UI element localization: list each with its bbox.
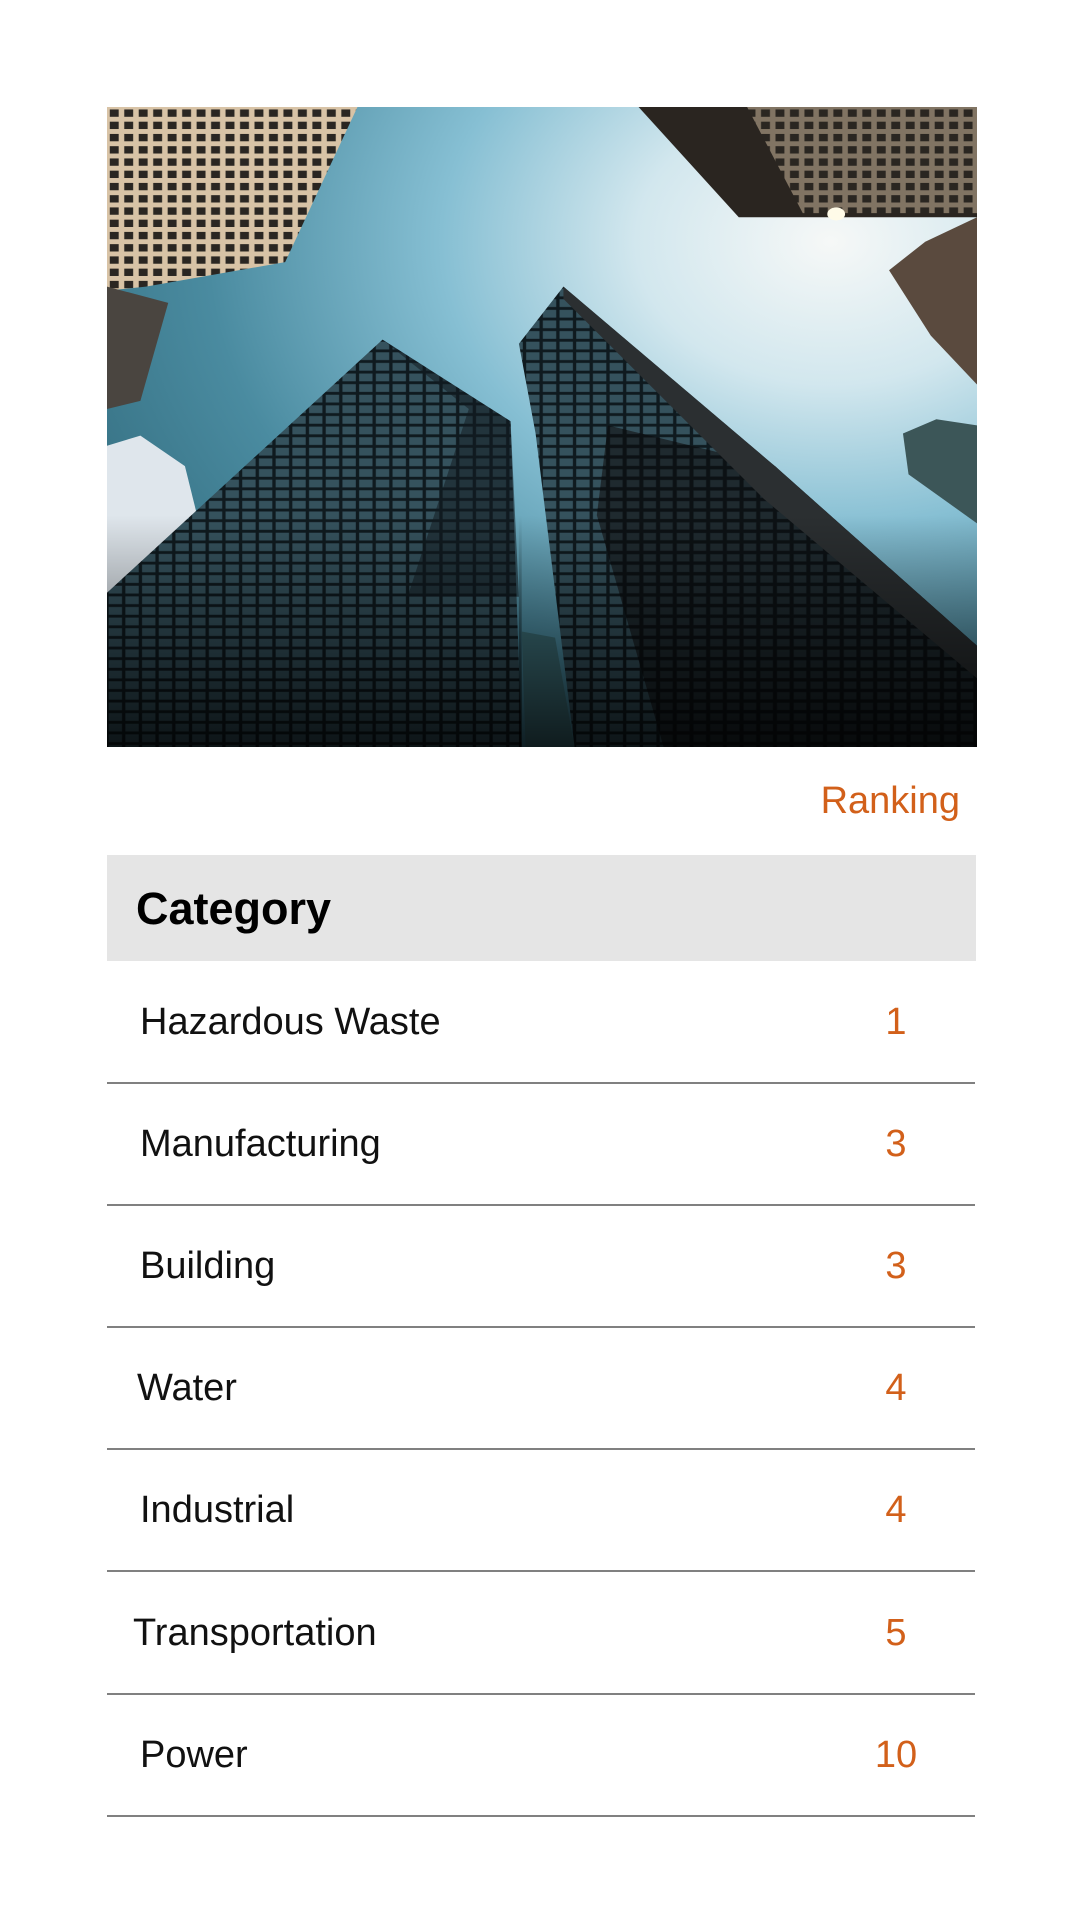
building: left white <box>107 436 196 609</box>
row: Industrial: Industrial <box>140 1489 294 1531</box>
row: Water <box>107 1328 975 1450</box>
building: left tower <box>107 340 522 747</box>
row: Power: 10 <box>875 1734 917 1776</box>
sun glare <box>827 207 845 220</box>
building: right tower <box>519 287 977 747</box>
row: Hazardous Waste <box>107 962 975 1084</box>
row: Building: 3 <box>885 1245 907 1287</box>
row: Industrial <box>107 1450 975 1572</box>
building: right middle <box>889 217 977 385</box>
row: Power <box>107 1695 975 1817</box>
row: Hazardous Waste: Hazardous Waste <box>140 1001 441 1043</box>
photo: skyscrapers <box>107 107 977 747</box>
building: top right <box>639 107 977 217</box>
table header: Category <box>136 883 331 934</box>
row: Manufacturing: Manufacturing <box>140 1123 381 1165</box>
row: Building: Building <box>140 1245 275 1287</box>
row: Manufacturing: 3 <box>885 1123 907 1165</box>
building: top left <box>107 107 357 291</box>
table header <box>107 855 976 961</box>
row: Transportation: 5 <box>885 1612 907 1654</box>
ranking label: Ranking <box>821 780 960 822</box>
building: small center <box>522 631 575 747</box>
sky <box>107 107 977 747</box>
row: Water: Water <box>137 1367 237 1409</box>
row: Water: 4 <box>885 1367 907 1409</box>
row: Power: Power <box>140 1734 248 1776</box>
building: right lower <box>903 419 977 523</box>
row: Transportation: Transportation <box>133 1612 377 1654</box>
row: Building <box>107 1206 975 1328</box>
row: Industrial: 4 <box>885 1489 907 1531</box>
row: Hazardous Waste: 1 <box>885 1001 907 1043</box>
row: Manufacturing <box>107 1084 975 1206</box>
row: Transportation <box>107 1573 975 1695</box>
